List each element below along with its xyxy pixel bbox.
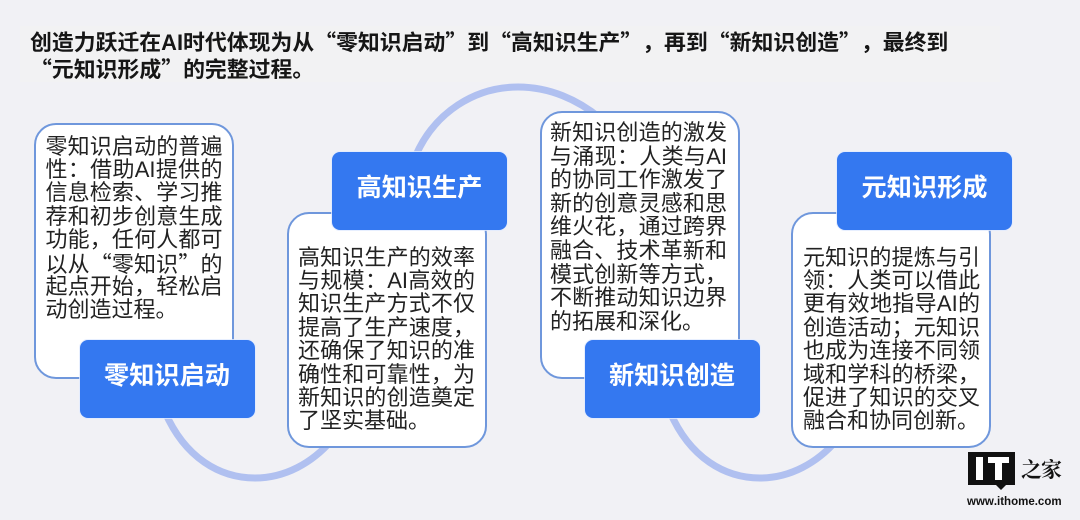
title <box>30 26 948 84</box>
panel: meta-knowledge description: 融合和协同创新。 <box>803 408 979 433</box>
panel: new-knowledge description: 新的创意灵感和思 <box>550 191 727 216</box>
panel: high-knowledge description: 新知识的创造奠定 <box>298 385 475 410</box>
panel: high-knowledge description: 还确保了知识的准 <box>298 338 475 363</box>
panel: new-knowledge description: 新知识创造的激发 <box>550 120 727 145</box>
label: high-knowledge production <box>332 152 507 230</box>
panel: meta-knowledge description <box>791 212 991 448</box>
label: meta-knowledge formation: 元知识形成 <box>862 174 987 202</box>
panel: high-knowledge description: 提高了生产速度， <box>298 315 475 340</box>
panel: new-knowledge description <box>540 111 740 379</box>
panel: high-knowledge description: 与规模：AI高效的 <box>298 268 475 293</box>
panel: new-knowledge description: 融合、技术革新和 <box>550 238 727 263</box>
title: 创造力跃迁在AI时代体现为从“零知识启动”到“高知识生产”，再到“新知识创造”，最终到 <box>30 26 948 57</box>
panel: new-knowledge description: 的协同工作激发了 <box>550 167 727 192</box>
label: new-knowledge creation <box>584 340 760 418</box>
panel: new-knowledge description: 的拓展和深化。 <box>550 309 704 334</box>
logo characters: 之家 <box>1021 454 1061 484</box>
panel: high-knowledge description: 高知识生产的效率 <box>298 244 475 270</box>
title background <box>20 26 1000 82</box>
panel: meta-knowledge description: 元知识的提炼与引 <box>803 244 980 270</box>
panel: zero-knowledge description: 荐和初步创意生成 <box>46 204 222 229</box>
panel: zero-knowledge description: 功能，任何人都可 <box>46 227 222 252</box>
panel: meta-knowledge description: 创造活动；元知识 <box>803 315 980 340</box>
panel: high-knowledge description: 了坚实基础。 <box>298 408 430 433</box>
icon: IT speech badge <box>968 452 1015 490</box>
label: zero-knowledge start <box>80 340 254 418</box>
panel: zero-knowledge description: 动创造过程。 <box>46 297 178 322</box>
panel: zero-knowledge description: 零知识启动的普遍 <box>46 134 222 158</box>
panel: meta-knowledge description: 也成为连接不同领 <box>803 338 980 363</box>
panel: meta-knowledge description: 促进了知识的交叉 <box>803 385 980 410</box>
label: high-knowledge production: 高知识生产 <box>357 174 482 202</box>
title: “元知识形成”的完整过程。 <box>30 52 314 84</box>
panel: new-knowledge description: 模式创新等方式， <box>550 262 727 287</box>
panel: meta-knowledge description: 域和学科的桥梁， <box>803 362 980 387</box>
panel: zero-knowledge description: 性：借助AI提供的 <box>46 157 222 182</box>
panel: zero-knowledge description: 起点开始，轻松启 <box>46 274 222 299</box>
panel: high-knowledge description: 确性和可靠性，为 <box>298 362 475 387</box>
panel: high-knowledge description <box>286 212 486 448</box>
label: meta-knowledge formation <box>837 152 1012 230</box>
panel: high-knowledge description: 知识生产方式不仅 <box>298 291 475 316</box>
label: zero-knowledge start: 零知识启动 <box>104 362 230 390</box>
panel: new-knowledge description: 维火花，通过跨界 <box>550 214 727 239</box>
panel: meta-knowledge description: 更有效地指导AI的 <box>803 291 980 316</box>
panel: zero-knowledge description: 以从“零知识”的 <box>46 246 222 278</box>
panel: meta-knowledge description: 领：人类可以借此 <box>803 268 980 293</box>
logo: ITHome watermark <box>967 452 1062 508</box>
label: new-knowledge creation: 新知识创造 <box>609 362 735 390</box>
panel: new-knowledge description: 不断推动知识边界 <box>550 285 727 310</box>
panel: zero-knowledge description: 信息检索、学习推 <box>46 180 222 205</box>
panel: zero-knowledge description <box>34 123 234 379</box>
panel: new-knowledge description: 与涌现：人类与AI <box>550 144 727 169</box>
website address: www.ithome.com <box>967 496 1062 508</box>
